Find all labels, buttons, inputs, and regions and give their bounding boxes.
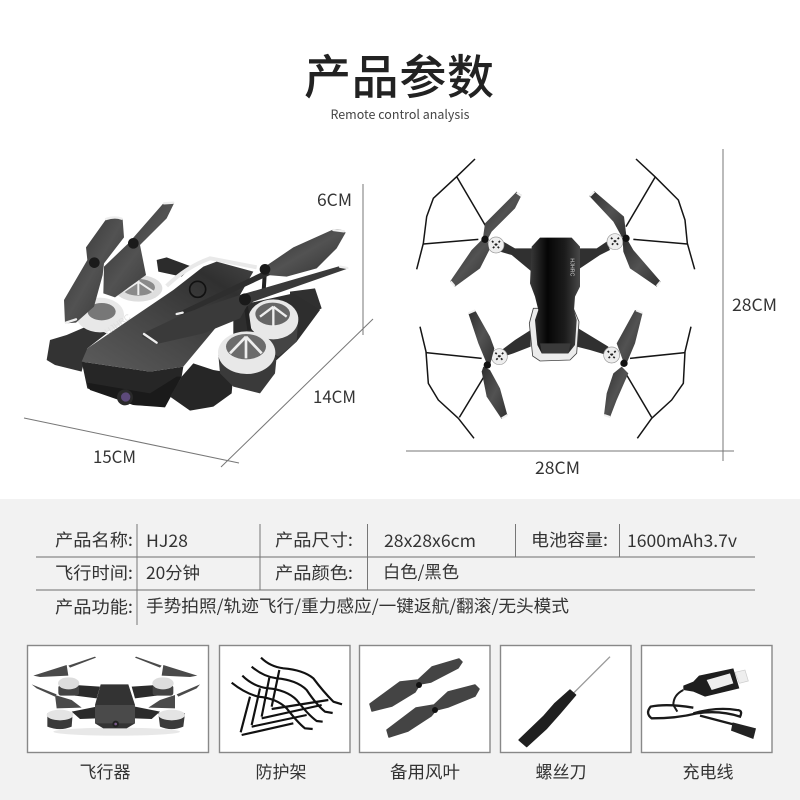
label: 6CM: 6CM — [317, 186, 352, 211]
row: name, size, battery: 电池容量: — [531, 526, 608, 551]
accessory: charging cable — [642, 646, 772, 752]
row: flight time, colour: 白色/黑色 — [383, 558, 459, 583]
row: name, size, battery: 28x28x6cm — [384, 527, 476, 552]
folded drone with dimension lines — [24, 184, 373, 468]
label: 15CM: 15CM — [93, 443, 136, 468]
specification table — [36, 524, 755, 625]
row: name, size, battery: HJ28 — [146, 527, 188, 552]
accessory: aircraft — [28, 646, 208, 752]
accessory label: cable: 充电线 — [682, 758, 734, 783]
screwdriver thumbnail — [519, 657, 610, 747]
blades image box — [360, 646, 490, 752]
accessory: screwdriver — [500, 646, 631, 752]
dimension lines: unfolded size — [406, 149, 734, 461]
label: 14CM: 14CM — [313, 383, 356, 408]
accessory label: screwdriver: 螺丝刀 — [536, 758, 586, 783]
drone: folded perspective view: HJHRC — [103, 312, 132, 337]
row: flight time, colour — [55, 558, 459, 584]
label: 28CM width: 28CM — [535, 454, 580, 479]
top-view drone with dimension lines — [406, 149, 777, 479]
drone: top view with propeller guards — [417, 159, 695, 438]
subtitle: Remote control analysis — [330, 104, 470, 123]
accessory label: blades: 备用风叶 — [390, 758, 460, 783]
drone: folded perspective view — [47, 202, 348, 411]
row: functions: 产品功能: — [55, 593, 133, 618]
guards image box — [220, 646, 350, 752]
gray specification band — [0, 499, 800, 800]
blades thumbnail — [370, 659, 479, 737]
accessory label: guards: 防护架 — [256, 758, 306, 783]
row: flight time, colour: 飞行时间: — [55, 559, 133, 584]
row: name, size, battery: 产品名称: — [55, 526, 133, 551]
aircraft thumbnail — [32, 657, 200, 736]
cable thumbnail — [648, 668, 756, 739]
label: 28CM height: 28CM — [732, 291, 777, 316]
screwdriver image box — [500, 646, 631, 752]
accessory: propeller guards — [220, 646, 350, 752]
row: flight time, colour: 产品颜色: — [275, 559, 353, 584]
row: name, size, battery: 产品尺寸: — [275, 526, 353, 551]
row: functions: 手势拍照/轨迹飞行/重力感应/一键返航/翻滚/无头模式 — [146, 592, 569, 617]
aircraft image box — [28, 646, 208, 752]
row: name, size, battery: 1600mAh3.7v — [627, 527, 737, 552]
guards thumbnail — [232, 658, 342, 735]
title: 产品参数 — [304, 39, 494, 108]
accessory label: aircraft: 飞行器 — [80, 758, 130, 783]
row: name, size, battery — [55, 526, 737, 552]
accessory: spare blades — [360, 646, 490, 752]
table grid lines — [36, 524, 755, 625]
row: flight time, colour: 20分钟 — [146, 559, 200, 584]
drone: top view with propeller guards: HJHRC — [568, 258, 574, 277]
dimension lines: folded size — [24, 184, 373, 467]
cable image box — [642, 646, 772, 752]
